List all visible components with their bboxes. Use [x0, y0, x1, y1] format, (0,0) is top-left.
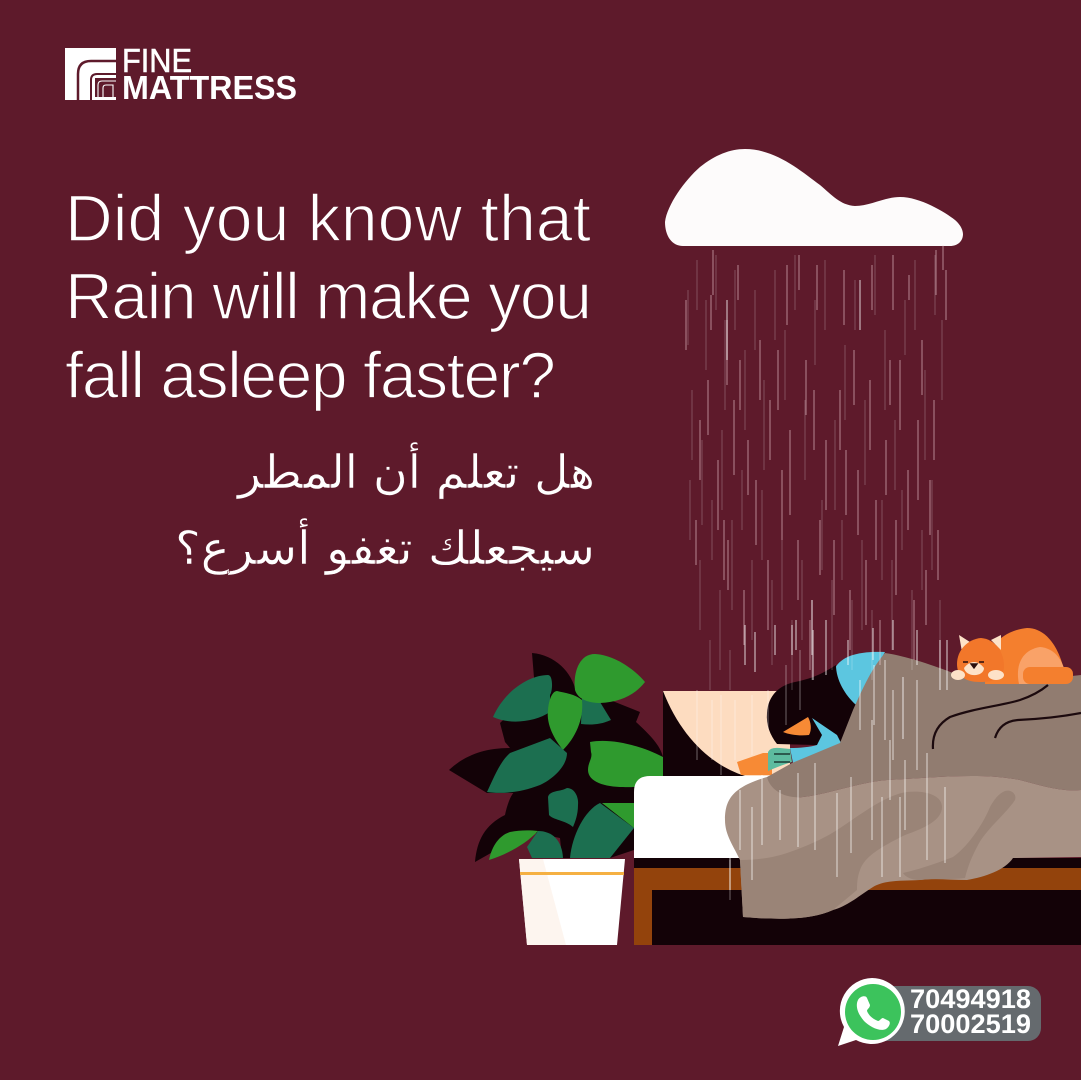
teal leaf behind centre: [581, 698, 611, 725]
logo: Fine Mattress: [65, 42, 297, 106]
sleeper hand: [737, 753, 772, 775]
blanket crease long: [933, 685, 1048, 749]
sleeper hair: [767, 665, 856, 745]
green leaf centre: [548, 691, 582, 750]
rain over pillow: [697, 650, 800, 900]
sleeper fist: [768, 748, 792, 771]
sleeper arm: [790, 718, 841, 763]
person: [737, 652, 885, 775]
phone numbers: 70494918: [910, 984, 1031, 1014]
icon: whatsapp: [838, 978, 905, 1046]
logo mark: [65, 48, 116, 100]
cat snout: [964, 662, 984, 675]
plant shadow leaves: [449, 653, 663, 862]
heading: Arabic: سيجعلك تغفو أسرع؟: [175, 518, 595, 576]
green leaf top: [575, 654, 645, 703]
mid rain: [686, 245, 946, 670]
phone number pill: [860, 986, 1041, 1041]
mattress: [634, 776, 790, 858]
bright rain: [727, 280, 947, 739]
logo word: MATTRESS: MATTRESS: [122, 69, 297, 106]
green leaf bottom left: [489, 830, 538, 860]
icon: cloud: [665, 149, 963, 246]
teal small leaf: [548, 788, 578, 827]
heading: English: fall asleep faster?: [65, 338, 556, 412]
blanket upper: [767, 653, 1081, 798]
heading: Arabic: [175, 442, 595, 576]
blanket lower: [725, 776, 1081, 919]
phone numbers: 70002519: [910, 1009, 1031, 1039]
blanket fold right: [903, 791, 1015, 880]
illustration: plant: [449, 653, 663, 945]
teal leaf upper left: [493, 675, 552, 722]
cat ears: [959, 635, 973, 652]
rain over blanket: [730, 660, 945, 890]
illustration: bed frame: [634, 858, 1081, 945]
blanket: [725, 653, 1081, 919]
heading: English: Rain will make you: [65, 259, 592, 333]
phone numbers: [910, 984, 1031, 1039]
heading: Arabic: هل تعلم أن المطر: [236, 442, 595, 500]
teal leaf large: [487, 738, 567, 793]
plant pot: [519, 859, 625, 945]
sleeper shoulder: [835, 652, 885, 705]
cat paws: [951, 670, 965, 680]
cat body: [985, 628, 1064, 684]
cat haunch: [1018, 647, 1065, 684]
faint rain: [688, 255, 942, 690]
teal leaf bottom: [570, 803, 634, 858]
blanket fold left: [740, 792, 942, 919]
rain: [686, 245, 947, 900]
green wedge leaf: [602, 803, 634, 828]
pillow: [663, 691, 790, 776]
green leaf right: [588, 741, 663, 787]
cat head: [957, 638, 1004, 682]
whatsapp contact: [838, 978, 1041, 1046]
cat tail: [1023, 667, 1073, 684]
heading: English: [65, 181, 592, 412]
headboard: [663, 691, 783, 777]
sleeper face: [783, 717, 811, 735]
blanket crease short: [995, 713, 1081, 738]
cat: [951, 628, 1073, 684]
heading: English: Did you know that: [65, 181, 591, 255]
logo word: FINE: FINE: [122, 42, 192, 79]
teal leaf bottom left: [527, 831, 563, 858]
